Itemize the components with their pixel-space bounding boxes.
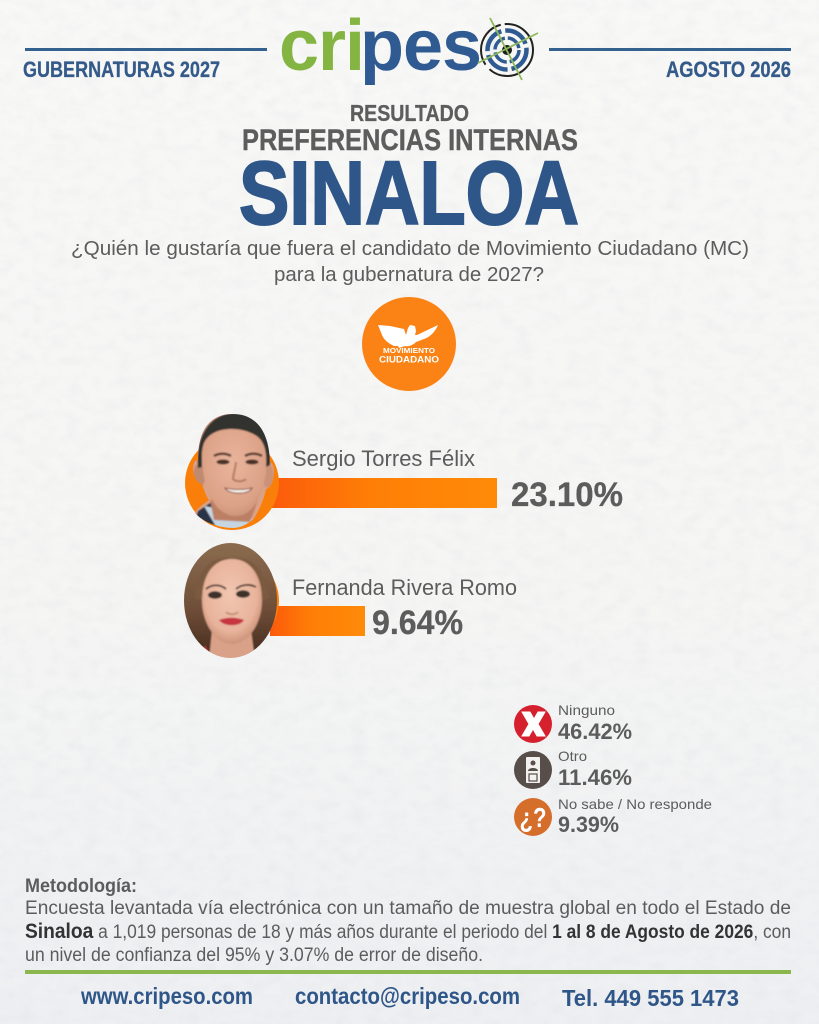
name 2: Fernanda Rivera Romo xyxy=(292,575,517,600)
bar 2 xyxy=(270,606,365,636)
option: ninguno xyxy=(514,702,632,744)
question: para la gubernatura de 2027? xyxy=(274,264,544,286)
methodology xyxy=(25,876,791,966)
option: no sabe: 9.39% xyxy=(558,812,619,837)
value 2: 9.64% xyxy=(372,604,463,642)
option: no sabe: ¿? xyxy=(520,802,546,833)
portrait 2 xyxy=(184,543,279,658)
heading: resultado: RESULTADO xyxy=(350,100,469,126)
header rule right xyxy=(549,48,791,51)
phone: Tel. 449 555 1473 xyxy=(562,985,739,1011)
website: www.cripeso.com xyxy=(80,983,253,1009)
logo: cripeso xyxy=(279,6,538,86)
question xyxy=(71,238,749,286)
option: no sabe: No sabe / No responde xyxy=(558,796,712,812)
candidate 1: Sergio Torres Félix xyxy=(185,410,623,535)
option: ninguno: 46.42% xyxy=(558,719,632,744)
methodology heading: Metodología: xyxy=(25,876,137,897)
header left label: GUBERNATURAS 2027 xyxy=(23,57,220,82)
logo wordmark blue: pes xyxy=(360,6,482,86)
header rule left xyxy=(25,48,267,51)
other options xyxy=(514,702,712,837)
option: otro xyxy=(514,748,632,790)
footer rule xyxy=(25,970,791,974)
methodology line 1: Encuesta levantada vía electrónica con un tamaño de muestra global en todo el Estado de xyxy=(25,898,791,919)
header right label: AGOSTO 2026 xyxy=(666,57,791,82)
portrait 1 xyxy=(185,410,280,535)
bar 1 xyxy=(270,478,497,508)
option: otro: Otro xyxy=(558,748,587,764)
logo wordmark green: cri xyxy=(279,6,365,86)
value 1: 23.10% xyxy=(511,476,623,514)
name 1: Sergio Torres Félix xyxy=(292,446,475,471)
party logo: Movimiento Ciudadano xyxy=(362,297,456,391)
question: ¿Quién le gustaría que fuera el candidato de Movimiento Ciudadano (MC) xyxy=(71,238,749,260)
option: otro: 11.46% xyxy=(558,765,632,790)
methodology line 3: un nivel de confianza del 95% y 3.07% de error de diseño. xyxy=(25,945,483,966)
email: contacto@cripeso.com xyxy=(295,983,520,1009)
heading: sinaloa: SINALOA xyxy=(239,144,579,244)
logo target icon xyxy=(478,18,538,80)
footer contact xyxy=(80,983,739,1011)
option: ninguno: Ninguno xyxy=(558,702,615,718)
option: no sabe xyxy=(514,796,712,837)
methodology line 2: Sinaloa a 1,019 personas de 18 y más años durante el periodo del 1 al 8 de Agosto de 2026, con xyxy=(25,920,791,943)
party logo: Movimiento Ciudadano: CIUDADANO xyxy=(379,354,439,366)
party logo: Movimiento Ciudadano: MOVIMIENTO xyxy=(383,348,436,355)
heading: preferencias internas: PREFERENCIAS INTERNAS xyxy=(242,124,578,157)
candidate 2: Fernanda Rivera Romo xyxy=(180,540,517,665)
